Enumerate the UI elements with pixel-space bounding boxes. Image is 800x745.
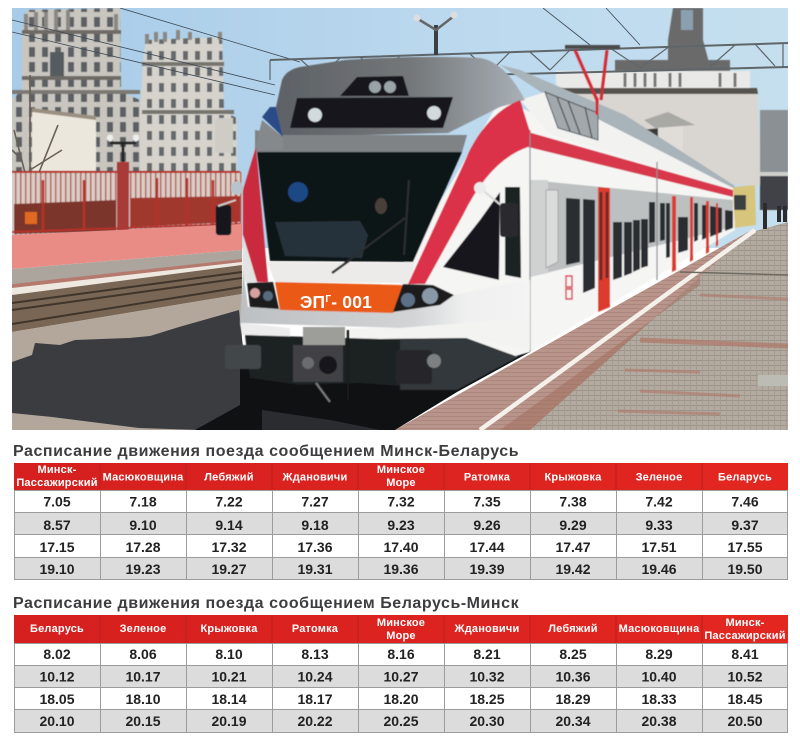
under-train shadow	[195, 352, 530, 430]
table header: stations	[14, 463, 788, 490]
red stripe	[528, 132, 733, 197]
departure row 3: 18.10	[125, 691, 161, 707]
departure row 2: 9.26	[473, 517, 501, 533]
departure row 4: 19.36	[383, 561, 419, 577]
display lights	[308, 108, 322, 122]
overhead wires	[12, 8, 640, 95]
top display panel	[290, 97, 453, 128]
lamp post	[414, 12, 458, 55]
departure row 1: 8.13	[301, 646, 329, 662]
roof grey	[500, 65, 735, 188]
departure row 3: 17.47	[555, 539, 591, 555]
train number: ЭП	[300, 292, 325, 312]
departure row 4: 20.15	[125, 713, 161, 729]
top sensor housing	[340, 76, 409, 96]
table header: stations: Ждановичи	[454, 623, 519, 635]
departure row 4: 19.39	[469, 561, 505, 577]
departure row 3: 17.36	[297, 539, 333, 555]
right headlight	[393, 284, 454, 312]
departure row 2	[39, 668, 763, 684]
side cab window	[443, 192, 500, 280]
departure row 1: 7.42	[645, 494, 673, 510]
table: Minsk to Belarus	[14, 463, 788, 580]
train	[216, 47, 735, 402]
departure row 2: 9.23	[387, 517, 415, 533]
red fence with crowd	[12, 134, 242, 235]
overhead gantry	[270, 43, 788, 80]
departure row 3: 18.29	[555, 691, 591, 707]
departure row 1: 8.06	[129, 646, 157, 662]
heading: Minsk to Belarus schedule: Расписание движения поезда сообщением Минск-Беларусь	[13, 443, 519, 460]
station building	[556, 8, 788, 228]
departure row 1: 8.02	[43, 646, 71, 662]
departure row 4: 19.42	[555, 561, 591, 577]
departure row 3: 17.40	[383, 539, 419, 555]
blue roof corner	[262, 107, 283, 137]
heading: Belarus to Minsk schedule: Расписание движения поезда сообщением Беларусь-Минск	[13, 595, 520, 612]
table header: stations: Беларусь	[718, 472, 772, 484]
dark skirt	[245, 335, 518, 390]
departure row 1	[43, 494, 759, 510]
table header: stations: Крыжовка	[200, 623, 258, 635]
table header: stations: Зеленое	[120, 623, 166, 635]
departure row 3: 18.20	[383, 691, 419, 707]
departure row 4: 19.27	[211, 561, 247, 577]
departure row 4: 20.19	[211, 713, 247, 729]
table header: stations: Зеленое	[636, 472, 682, 484]
departure row 3: 17.55	[727, 539, 763, 555]
table header: stations: Лебяжий	[548, 623, 598, 635]
departure row 1: 8.41	[731, 646, 759, 662]
grey cab roof	[276, 57, 525, 137]
departure row 1: 7.05	[43, 494, 71, 510]
table header: stations	[14, 615, 788, 643]
table header: stations: Море	[386, 630, 416, 642]
ground	[12, 294, 242, 430]
departure row 1: 7.27	[301, 494, 329, 510]
departure row 4: 20.38	[641, 713, 677, 729]
orange number plate	[275, 282, 403, 313]
departure row 1: 7.46	[731, 494, 759, 510]
departure row 1: 7.32	[387, 494, 415, 510]
bare tree	[12, 75, 62, 235]
departure row 3: 18.14	[211, 691, 247, 707]
rail tracks	[12, 265, 242, 332]
departure row 1: 7.18	[129, 494, 157, 510]
departure row 3: 18.25	[469, 691, 505, 707]
table header: stations: Минск-	[37, 464, 77, 476]
departure row 1: 7.38	[559, 494, 587, 510]
tree shadow on ground	[12, 310, 250, 430]
coupler	[293, 327, 348, 402]
table header: stations: Минское	[377, 617, 425, 629]
platform paving	[395, 222, 788, 430]
table header: stations: Минское	[377, 464, 425, 476]
table header: stations: Море	[386, 477, 416, 489]
departure row 2: 10.40	[641, 668, 677, 684]
carriage logo	[566, 276, 572, 299]
side mirror	[474, 182, 518, 237]
pantograph	[565, 47, 620, 115]
departure row 3: 17.44	[469, 539, 505, 555]
departure row 2: 10.27	[383, 668, 419, 684]
departure row 1: 7.35	[473, 494, 501, 510]
table: Belarus to Minsk	[14, 615, 788, 733]
white curb	[12, 261, 242, 295]
windscreen	[257, 152, 462, 262]
departure row 4: 20.34	[555, 713, 591, 729]
departure row 4: 20.30	[469, 713, 505, 729]
departure row 2: 10.17	[125, 668, 161, 684]
table header: stations: Масюковщина	[103, 472, 184, 484]
departure row 4: 19.50	[727, 561, 763, 577]
table header: stations: Крыжовка	[544, 472, 602, 484]
departure row 4	[39, 561, 763, 577]
departure row 4: 20.50	[727, 713, 763, 729]
table header: stations: Минск-	[725, 617, 765, 629]
departure row 2: 10.12	[39, 668, 75, 684]
departure row 2: 9.33	[645, 517, 673, 533]
table grid	[14, 643, 788, 733]
departure row 4	[39, 713, 763, 729]
departure row 4: 19.10	[39, 561, 75, 577]
departure row 3: 18.33	[641, 691, 677, 707]
table header: stations: Пассажирский	[16, 477, 98, 489]
table header: stations: Ратомка	[464, 472, 511, 484]
departure row 1	[43, 646, 759, 662]
departure row 1: 7.22	[215, 494, 243, 510]
departure row 1: 8.29	[645, 646, 673, 662]
departure row 3	[39, 539, 763, 555]
sky	[12, 8, 788, 248]
pink wall	[12, 224, 242, 269]
table header: stations: Беларусь	[30, 623, 84, 635]
departure row 1: 8.25	[559, 646, 587, 662]
wipers	[344, 180, 411, 263]
roof white	[520, 92, 733, 190]
departure row 3: 18.05	[39, 691, 75, 707]
white bumper	[240, 323, 290, 339]
table header: stations: Ждановичи	[282, 472, 347, 484]
departure row 2: 10.52	[727, 668, 763, 684]
table header: stations: Ратомка	[292, 623, 339, 635]
departure row 2: 9.37	[731, 517, 759, 533]
left station towers	[12, 8, 237, 172]
train side body	[399, 104, 736, 357]
left red band	[243, 147, 268, 282]
side windows and doors	[566, 198, 733, 293]
train number: Г	[325, 294, 331, 305]
departure row 1: 8.21	[473, 646, 501, 662]
departure row 4: 19.23	[125, 561, 161, 577]
departure row 2: 10.36	[555, 668, 591, 684]
departure row 4: 20.22	[297, 713, 333, 729]
table grid	[14, 490, 788, 580]
departure row 2: 10.32	[469, 668, 505, 684]
departure row 4: 19.31	[297, 561, 333, 577]
sidewalk	[12, 250, 242, 284]
departure row 1: 8.10	[215, 646, 243, 662]
departure row 2	[43, 517, 759, 533]
photo: train at Minsk station	[12, 8, 788, 430]
departure row 2: 10.24	[297, 668, 333, 684]
buffers	[225, 345, 261, 369]
people on platform	[765, 203, 785, 229]
departure row 2: 9.14	[215, 517, 243, 533]
white band below windscreen	[267, 262, 415, 283]
departure row 3	[39, 691, 763, 707]
silver lower nose	[240, 270, 530, 328]
left mirror	[216, 181, 243, 235]
departure row 2: 9.29	[559, 517, 587, 533]
departure row 4: 19.46	[641, 561, 677, 577]
left headlight	[247, 282, 279, 309]
departure row 3: 17.32	[211, 539, 247, 555]
departure row 2: 8.57	[43, 517, 71, 533]
roof windows	[545, 92, 598, 140]
departure row 3: 18.17	[297, 691, 333, 707]
grey window band	[548, 182, 734, 273]
departure row 3: 17.28	[125, 539, 161, 555]
departure row 2: 9.10	[129, 517, 157, 533]
table header: stations: Масюковщина	[619, 623, 700, 635]
departure row 3: 17.15	[39, 539, 75, 555]
departure row 4: 20.10	[39, 713, 75, 729]
table header: stations: Пассажирский	[704, 630, 786, 642]
train number: - 001	[331, 292, 372, 312]
departure row 2: 9.18	[301, 517, 329, 533]
departure row 2: 10.21	[211, 668, 247, 684]
departure row 3: 17.51	[641, 539, 677, 555]
red curved band	[408, 100, 530, 284]
departure row 1: 8.16	[387, 646, 415, 662]
table header: stations: Лебяжий	[204, 472, 254, 484]
departure row 3: 18.45	[727, 691, 763, 707]
departure row 4: 20.25	[383, 713, 419, 729]
